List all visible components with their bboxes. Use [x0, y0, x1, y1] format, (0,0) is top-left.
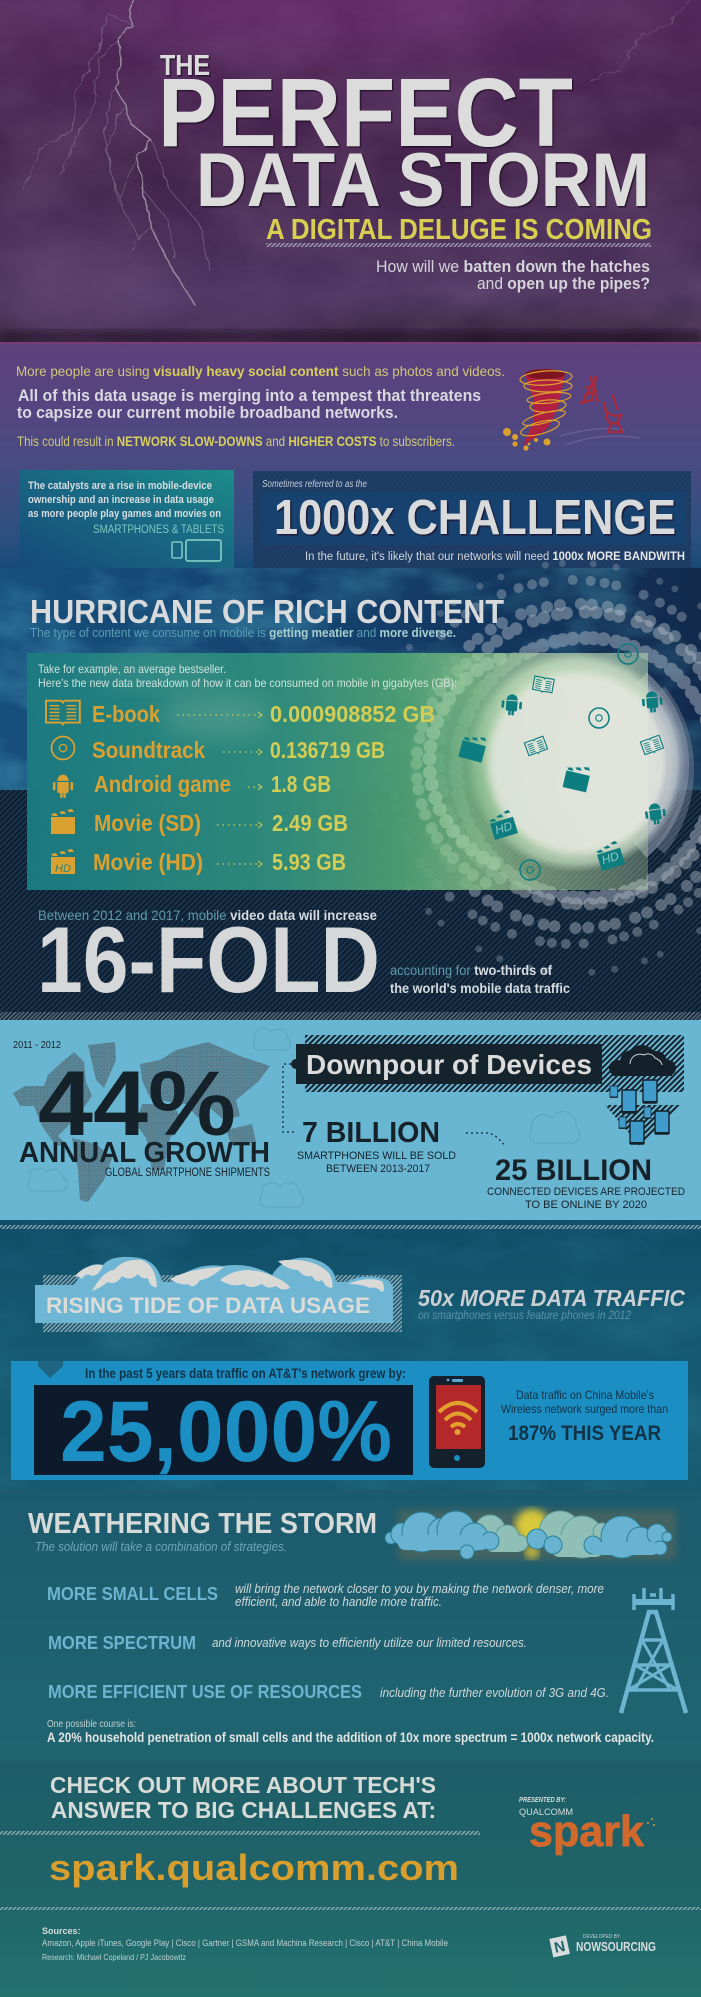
panel: data breakdown: Take for example, an average bestseller. — [38, 662, 226, 676]
stat: 25 billion: 25 BILLION — [495, 1154, 652, 1187]
row: android game: 1.8 GB — [271, 771, 331, 797]
stat: 16-fold video growth: Between 2012 and 2017, mobile video data will increase — [38, 907, 377, 923]
panel: catalysts callout: as more people play games and movies on — [28, 508, 221, 520]
icons: swirling content in hurricane — [458, 644, 667, 880]
panel: catalysts callout — [20, 470, 234, 568]
panel: 25,000% growth — [11, 1361, 688, 1480]
text: intro copy: This could result in NETWORK SLOW-DOWNS and HIGHER COSTS to subscribers. — [17, 433, 455, 449]
row: movie hd: 5.93 GB — [272, 849, 346, 875]
logo: qualcomm spark: PRESENTED BY: — [519, 1797, 566, 1804]
row: android game: Android game — [94, 771, 231, 797]
row: e-book: 0.000908852 GB — [270, 701, 435, 727]
text: sources: Amazon, Apple iTunes, Google Play | Cisco | Gartner | GSMA and Machina Research | Cisco | AT&T | China Mobile — [42, 1938, 448, 1949]
heading: weathering the storm — [28, 1508, 377, 1554]
logo: nowsourcing — [549, 1934, 656, 1957]
title: PERFECT — [158, 58, 573, 167]
text: china mobile stat: Data traffic on China Mobile's — [516, 1388, 654, 1402]
row: soundtrack — [52, 736, 385, 763]
heading: weathering the storm: WEATHERING THE STORM — [28, 1508, 377, 1540]
call to action: spark.qualcomm.com — [49, 1847, 459, 1888]
heading: rising tide with waves — [35, 1257, 402, 1332]
icon: clouds and sun — [385, 1509, 676, 1560]
icons: swirling content in hurricane: HD — [493, 819, 514, 837]
panel: 1000x challenge: In the future, it's likely that our networks will need 1000x MORE BANDWITH — [305, 551, 685, 563]
text: china mobile stat: 187% THIS YEAR — [508, 1422, 661, 1445]
logo: nowsourcing: DEVELOPED BY — [583, 1934, 621, 1940]
row: movie hd: Movie (HD) — [93, 849, 203, 875]
stat: 25 billion — [487, 1154, 685, 1211]
panel: catalysts callout: ownership and an increase in data usage — [28, 494, 214, 506]
stat: 50x more data traffic — [418, 1285, 685, 1322]
stat: 7 billion: 7 BILLION — [302, 1117, 440, 1149]
panel: devices section — [0, 1020, 701, 1220]
row: movie hd: HD — [55, 863, 71, 875]
strategy: more spectrum: and innovative ways to efficiently utilize our limited resources. — [212, 1635, 527, 1650]
stat: 16-fold video growth: the world's mobile data traffic — [390, 980, 570, 996]
world map — [13, 1042, 270, 1202]
heading: hurricane of rich content: HURRICANE OF RICH CONTENT — [30, 593, 504, 630]
row: e-book — [46, 701, 435, 727]
row: movie sd: 2.49 GB — [272, 810, 348, 836]
icon: hurricane spiral — [370, 563, 701, 973]
strategy: more spectrum — [48, 1632, 527, 1653]
text: china mobile stat — [501, 1388, 668, 1445]
row: movie sd: Movie (SD) — [94, 810, 201, 836]
text: intro copy: All of this data usage is merging into a tempest that threatens — [18, 387, 481, 405]
stat: 44% annual growth: GLOBAL SMARTPHONE SHIPMENTS — [105, 1167, 270, 1179]
title: THE — [160, 50, 210, 82]
icon: phone with wifi — [429, 1376, 485, 1468]
text: one possible course — [47, 1718, 654, 1745]
strategy: more small cells: efficient, and able to handle more traffic. — [235, 1594, 442, 1609]
title: DATA STORM — [196, 138, 650, 223]
stat: 25 billion: CONNECTED DEVICES ARE PROJECTED — [487, 1186, 685, 1198]
icons: swirling content in hurricane: HD — [600, 849, 621, 867]
logo: nowsourcing: N — [553, 1938, 567, 1957]
panel: intro section — [0, 342, 701, 570]
text: header question: How will we batten down the hatches — [376, 258, 650, 276]
panel: 1000x challenge: Sometimes referred to as the — [262, 479, 367, 490]
stat: 16-fold video growth: accounting for two-thirds of — [390, 962, 552, 978]
panel: storm header background — [0, 0, 701, 350]
panel: data breakdown — [27, 653, 648, 890]
row: movie hd — [51, 849, 346, 875]
heading: hurricane of rich content: The type of content we consume on mobile is getting meatier and more diverse. — [30, 625, 456, 640]
heading: downpour of devices: Downpour of Devices — [306, 1049, 592, 1080]
stat: 7 billion — [283, 1064, 456, 1175]
arrow: dotted to 25 billion — [466, 1133, 505, 1146]
stat: 50x more data traffic: 50x MORE DATA TRAFFIC — [418, 1285, 685, 1311]
strategy: more small cells — [47, 1581, 604, 1609]
panel: catalysts callout: SMARTPHONES & TABLETS — [93, 524, 224, 536]
row: e-book: E-book — [92, 701, 160, 727]
row: soundtrack: 0.136719 GB — [270, 737, 385, 763]
strategy: more small cells: will bring the network closer to you by making the network denser, more — [235, 1581, 604, 1596]
text: sources: Research: Michael Copeland / PJ Jacobowitz — [42, 1952, 186, 1962]
stat: 25 billion: TO BE ONLINE BY 2020 — [525, 1199, 647, 1211]
row: movie sd — [51, 809, 348, 836]
heading: rising tide with waves: RISING TIDE OF DATA USAGE — [46, 1293, 370, 1318]
stat: 50x more data traffic: on smartphones versus feature phones in 2012 — [418, 1310, 632, 1322]
stat: 16-fold video growth: 16-FOLD — [37, 907, 380, 1012]
panel: rising tide section — [0, 1220, 701, 1490]
title — [158, 50, 650, 223]
panel: weathering section — [0, 1490, 701, 1997]
logo: qualcomm spark: spark — [529, 1807, 645, 1856]
row: android game — [53, 771, 331, 798]
logo: nowsourcing: NOWSOURCING — [576, 1939, 656, 1954]
stat: 44% annual growth — [13, 1040, 270, 1179]
text: intro copy: More people are using visually heavy social content such as photos and videos. — [16, 363, 505, 379]
stat: 7 billion: BETWEEN 2013-2017 — [326, 1163, 430, 1175]
icon: cell tower — [621, 1588, 686, 1713]
text: one possible course: One possible course is: — [47, 1718, 136, 1730]
panel: 25,000% growth: In the past 5 years data traffic on AT&T's network grew by: — [85, 1365, 406, 1381]
text: header question: and open up the pipes? — [477, 275, 650, 293]
row: soundtrack: Soundtrack — [92, 737, 205, 763]
subtitle: a digital deluge: A DIGITAL DELUGE IS COMING — [266, 214, 652, 246]
text: intro copy — [16, 363, 505, 449]
stat: 44% annual growth: 44% — [38, 1053, 236, 1155]
panel: data breakdown: Here's the new data breakdown of how it can be consumed on mobile in gigabytes (GB): — [38, 676, 457, 690]
call to action: ANSWER TO BIG CHALLENGES AT: — [51, 1797, 436, 1823]
panel: 1000x challenge — [253, 471, 691, 568]
heading: downpour of devices — [291, 1035, 684, 1092]
heading: weathering the storm: The solution will take a combination of strategies. — [35, 1539, 287, 1554]
strategy: more small cells: MORE SMALL CELLS — [47, 1583, 218, 1604]
panel: catalysts callout: The catalysts are a rise in mobile-device — [28, 480, 212, 492]
icon: cloud raining devices — [605, 1045, 680, 1146]
icon: tornado with tower and dish — [503, 369, 640, 451]
text: intro copy: to capsize our current mobile broadband networks. — [17, 404, 398, 422]
panel: 25,000% growth: 25,000% — [60, 1384, 392, 1480]
logo: qualcomm spark: QUALCOMM — [519, 1807, 573, 1817]
text: header question — [376, 258, 650, 293]
strategy: more efficient use of resources — [48, 1681, 609, 1702]
strategy: more efficient use of resources: MORE EFFICIENT USE OF RESOURCES — [48, 1681, 362, 1702]
faint cloud outlines — [28, 1028, 580, 1207]
icon: lightning bolts — [24, 0, 690, 305]
text: sources — [42, 1926, 448, 1962]
stat: 44% annual growth: 2011 - 2012 — [13, 1040, 61, 1051]
strategy: more efficient use of resources: including the further evolution of 3G and 4G. — [380, 1685, 609, 1700]
strategy: more spectrum: MORE SPECTRUM — [48, 1632, 196, 1653]
call to action: CHECK OUT MORE ABOUT TECH'S — [50, 1772, 436, 1798]
text: sources: Sources: — [42, 1926, 81, 1936]
panel: hurricane background — [0, 568, 701, 1020]
stat: 44% annual growth: ANNUAL GROWTH — [19, 1137, 270, 1169]
call to action — [0, 1772, 480, 1888]
text: china mobile stat: Wireless network surged more than — [501, 1402, 668, 1416]
stat: 7 billion: SMARTPHONES WILL BE SOLD — [297, 1150, 456, 1162]
